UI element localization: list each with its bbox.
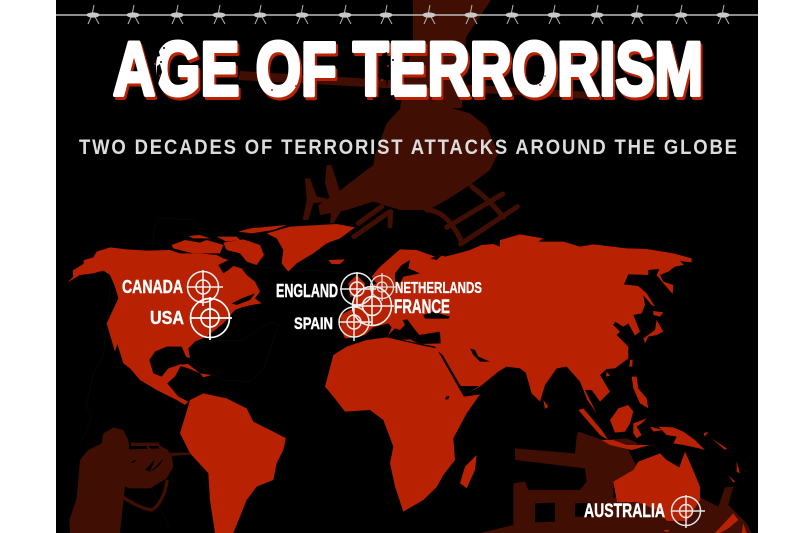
- North America: [67, 247, 262, 405]
- target: England: ENGLAND: [276, 281, 338, 301]
- Lake Victoria: [445, 396, 449, 399]
- rifleman silhouette: [69, 427, 190, 533]
- Black Sea: [423, 312, 450, 319]
- target: Netherlands: NETHERLANDS: [395, 280, 482, 297]
- Arctic islands: [172, 225, 287, 265]
- target: England: [276, 272, 376, 307]
- East Asia mainland: [500, 234, 692, 413]
- Caribbean islands: [177, 364, 212, 377]
- target: Australia: AUSTRALIA: [584, 501, 665, 522]
- subtitle: TWO DECADES OF TERRORIST ATTACKS AROUND THE GLOBE: [79, 136, 737, 159]
- target: USA: USA: [150, 308, 184, 328]
- target: Netherlands: [369, 273, 482, 301]
- target: France: [352, 286, 450, 326]
- Red Sea: [438, 352, 479, 395]
- Iceland small: [328, 257, 346, 263]
- target: Canada: [122, 270, 223, 306]
- target: Spain: SPAIN: [294, 314, 333, 333]
- target: France: FRANCE: [394, 297, 450, 318]
- Persian Gulf: [470, 348, 490, 362]
- Baltic Sea: [395, 260, 420, 283]
- Tasmania and New Zealand: [663, 513, 747, 533]
- barbed wire: [56, 5, 758, 24]
- target: USA: [150, 297, 232, 340]
- map: Americas: [67, 225, 287, 405]
- Indonesia and New Guinea: [578, 405, 740, 483]
- target: Canada: CANADA: [122, 277, 183, 297]
- St Lawrence gulf: [232, 293, 255, 305]
- White Sea: [430, 255, 442, 260]
- helicopter silhouette: [238, 0, 590, 244]
- map: Greenland, Iceland, South America: [180, 224, 355, 533]
- Australia: [613, 452, 700, 521]
- British Isles: [348, 275, 365, 297]
- tank silhouette: [480, 432, 752, 533]
- helicopter rotor blade: [238, 71, 590, 99]
- grunge specks on title: [146, 36, 396, 102]
- Europe and western Asia: [341, 244, 540, 395]
- Sakhalin, Japan, Taiwan, Hainan, Sri Lanka, Philippines: [543, 286, 663, 409]
- map: Southeast Asia and Australasia: [578, 405, 747, 533]
- helicopter body and skids: [303, 105, 517, 244]
- Madagascar: [460, 455, 477, 488]
- map: Asia: [500, 234, 692, 413]
- Greenland: [267, 224, 355, 272]
- South America: [180, 393, 286, 533]
- Africa: [325, 337, 480, 512]
- faint soldier outlines: [82, 218, 350, 530]
- map: Europe, Middle East, Africa: [325, 244, 540, 512]
- target: Spain: [294, 306, 372, 341]
- target: Australia: [584, 495, 705, 528]
- world map: [67, 224, 747, 533]
- Mediterranean Sea: [345, 319, 441, 344]
- Iceland: [328, 259, 345, 264]
- helicopter mast and tail: [400, 0, 491, 108]
